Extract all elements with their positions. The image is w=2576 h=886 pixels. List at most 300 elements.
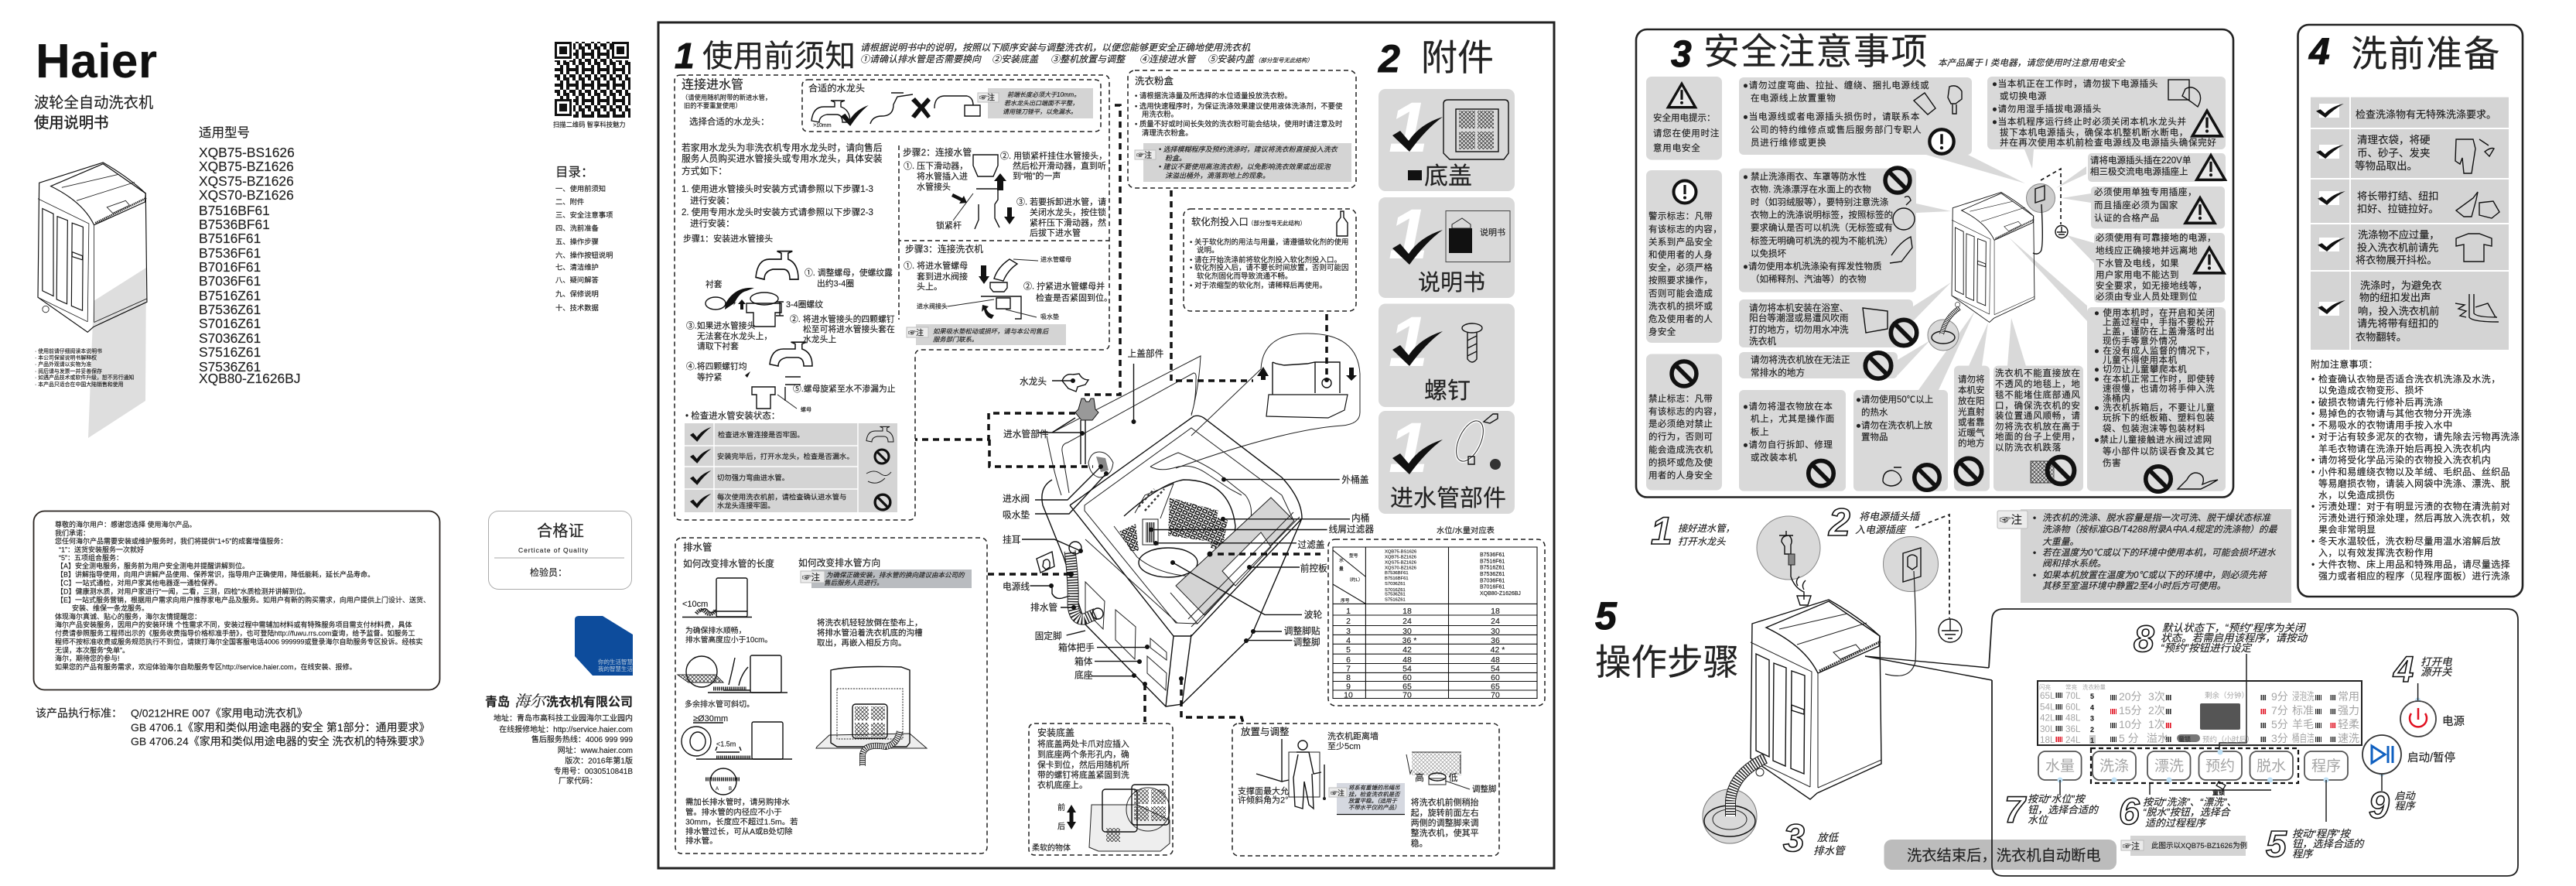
accessory card: manual: 说明书 xyxy=(1480,227,1505,238)
panel: drain hose: 售后服务人员进行。 xyxy=(824,579,883,587)
panel: water level table: 54 xyxy=(1491,665,1500,674)
inlet connection instructions: 进行安装： xyxy=(690,195,735,206)
step 2 connect hose: ①. 压下滑动器， xyxy=(904,161,968,171)
panel: install bottom cover: 衣机底座上。 xyxy=(1037,779,1088,790)
panel: section 4 pre-wash preparation: 4 xyxy=(2308,32,2330,73)
accessory card: manual: 说明书 xyxy=(1418,270,1485,296)
panel: connect inlet hose: 旧的不要重复使用） xyxy=(684,102,742,110)
panel: install bottom cover xyxy=(1029,724,1173,855)
safety: power cord xyxy=(1739,77,1972,155)
section 1 heading xyxy=(675,36,1313,76)
step 3 connect machine: 头上。 xyxy=(917,282,942,292)
panel: connect inlet hose: 连接进水管 xyxy=(682,78,743,92)
display panel: 15分 xyxy=(2119,704,2142,717)
safety: unplugging xyxy=(1987,77,2226,149)
panel: drain hose: 将排水管沿着洗衣机底的沟槽 xyxy=(817,628,923,638)
function buttons: 预约 xyxy=(2205,758,2235,775)
step 2 connect hose: ②. 用锁紧杆挂住水管接头， xyxy=(1000,150,1107,161)
grey banner: auto power off xyxy=(1884,840,2116,870)
note: faucet length: ☞注 xyxy=(979,93,995,102)
panel: water level table: 7 xyxy=(1346,665,1351,674)
company information: 专用号：0030510841B xyxy=(554,766,633,776)
panel: customer service promise: 您任何海尔产品需要安装或维护服务时，我们将提供“1+5”的成套增值服务： xyxy=(55,537,287,546)
safety: warning sign legend: 和使用者的人身 xyxy=(1648,249,1713,260)
display panel: 速洗 xyxy=(2338,732,2359,744)
display panel: 65L xyxy=(2040,691,2055,701)
table of contents: 九、保修说明 xyxy=(555,289,599,298)
step 8 caption xyxy=(2134,619,2308,660)
panel: customer service promise: 体现海尔真诚、贴心的服务，海尔友情提醒您： xyxy=(55,612,201,621)
panel: section 3 safety notes: 3 xyxy=(1671,34,1692,75)
additional notes list: • xyxy=(2311,455,2315,466)
safety: sunlight: 请勿将 xyxy=(1958,375,1985,385)
accessory card: manual: 1 xyxy=(1389,195,1428,274)
operating steps machine illustration xyxy=(1751,600,1992,799)
display panel: 42L xyxy=(2040,713,2055,724)
safety: humid places: 洗衣机 xyxy=(1749,336,1776,347)
display panel: 1 xyxy=(2090,737,2094,744)
panel: water level table: B7516Z61 xyxy=(1480,566,1505,571)
diagram part labels: 调整脚 xyxy=(1293,637,1320,648)
panel: water level table: 18 xyxy=(1402,607,1412,616)
step 3 connect machine: 步骤3：连接洗衣机 xyxy=(905,244,983,255)
section 1 heading: ⑤安装内盖 xyxy=(1208,54,1255,65)
table of contents: 一、使用前须知 xyxy=(555,184,606,193)
panel: water level table: B7516F61 xyxy=(1480,559,1505,564)
safety: warning sign legend: 危及使用者的人 xyxy=(1648,313,1713,324)
step 1 text: 出约3-4圈 xyxy=(817,278,854,289)
inlet hose check table: 切勿强力弯曲进水管。 xyxy=(717,474,789,482)
panel: detergent box: 用洗衣粉。 xyxy=(1142,110,1178,118)
step 1 text: 水龙头上 xyxy=(803,334,836,344)
safety: warning sign legend: 身安全 xyxy=(1648,327,1676,337)
safety: prohibition sign legend: 能会造成洗衣机 xyxy=(1648,444,1713,455)
preparation checklist: 将长带打结、纽扣 xyxy=(2357,190,2438,202)
display panel: 3 xyxy=(2090,715,2094,723)
safety: sunlight: 放在阳 xyxy=(1958,395,1985,406)
panel: drain hose: 将洗衣机轻轻放倒在垫布上， xyxy=(817,617,922,628)
step 1 text: • 检查进水管安装状态： xyxy=(685,410,780,421)
QR code xyxy=(553,42,630,128)
safety: waterproof clothing: 衣物上的洗涤说明标签，按照标签的 xyxy=(1751,210,1893,221)
cover: applicable models list: B7036F61 xyxy=(199,273,261,289)
cover: applicable models list: B7016F61 xyxy=(199,259,261,275)
panel: water level table: 10 xyxy=(1344,690,1353,700)
diagram part labels: 过滤盖 xyxy=(1297,539,1325,550)
display panel: 洗衣粉量 xyxy=(2082,683,2106,691)
step 2 connect hose: 锁紧杆 xyxy=(936,220,962,231)
note: capacity and temperature: 大重量。 xyxy=(2042,536,2079,547)
step 5 caption xyxy=(2266,824,2365,865)
panel: water level table: 42 xyxy=(1402,645,1412,655)
safety: grounding: 必须使用有可靠接地的电源， xyxy=(2096,232,2216,243)
thick dashed connectors xyxy=(915,105,1327,723)
panel: customer service promise: 尊敬的海尔用户：感谢您选择 使用海尔产品。 xyxy=(55,520,196,529)
table of contents: 四、洗前准备 xyxy=(555,224,599,232)
inlet parts: tap connector, hose and valve xyxy=(1062,374,1113,477)
company information: 海尔 xyxy=(514,693,548,710)
step 3 drain hose xyxy=(1703,758,1847,860)
step 6 caption xyxy=(2119,792,2236,833)
display panel: 3分 xyxy=(2271,732,2288,744)
preparation checklist xyxy=(2311,97,2509,350)
display panel: 18L xyxy=(2040,735,2055,745)
company information: 青岛 xyxy=(485,695,510,710)
table of contents: 二、附件 xyxy=(555,197,584,206)
detergent drawer callout xyxy=(1176,334,1360,468)
panel: water level table: XQS75-BZ1626 xyxy=(1385,560,1416,565)
panel: drain hose: ☞注 xyxy=(802,572,820,583)
safety: power cord: ●当电源线或者电源插头损伤时，请联系本 xyxy=(1743,111,1920,121)
display panel: 7分 xyxy=(2271,704,2288,717)
display panel: 5分 xyxy=(2271,718,2288,730)
button leader lines and child lock xyxy=(2060,683,2418,822)
display panel: 强力 xyxy=(2338,704,2359,717)
section 5 heading: operating steps: 5 xyxy=(1595,594,1618,638)
panel: water level table: 48 xyxy=(1491,655,1500,665)
panel: install bottom cover: 带的螺钉将底盖紧固到洗 xyxy=(1037,769,1129,780)
power button xyxy=(2400,701,2465,737)
panel: water level table: B7536F61 xyxy=(1480,552,1505,558)
safety: warning sign legend: 否则可能会造成 xyxy=(1648,288,1713,299)
panel: drain hose: 排水管过长，可从A或B处切除 xyxy=(685,826,793,836)
display panel: 70L xyxy=(2065,691,2081,701)
cover: applicable models list: B7516BF61 xyxy=(199,203,270,218)
company information: 版次：2016年第1版 xyxy=(565,756,633,766)
note: capacity and temperature: 若在温度为0℃或以下的环境中使用本机，可能会损坏进水 xyxy=(2042,547,2277,558)
panel: softener inlet: • 请在开始洗涤前将软化剂投入软化剂投入口。 xyxy=(1190,255,1341,265)
panel: drain hose: 如何改变排水管的长度 xyxy=(683,558,774,569)
display panel: 30L xyxy=(2040,724,2055,734)
safety: hot water: 置物品 xyxy=(1861,432,1888,443)
safety: wet clothes: 或改装本机 xyxy=(1751,452,1798,463)
company information: 网址：www.haier.com xyxy=(558,745,633,755)
safety: children: ● 在本机正常工作时，即使转 xyxy=(2094,373,2216,384)
safety: central washer with socket and drain xyxy=(1928,169,2068,351)
safety: sunlight: 的地方 xyxy=(1958,438,1985,449)
blue brand tag: 你的生活智慧 xyxy=(598,658,633,665)
panel: detergent box: • 质量不好或时间长失效的洗衣粉可能会结块，使用时请注意及时 xyxy=(1135,120,1342,128)
display panel: 2 xyxy=(2090,726,2094,734)
step 3 connect machine: 进水管螺母 xyxy=(1040,255,1071,263)
additional notes list: 以免造成衣物变形、损坏 xyxy=(2318,385,2424,396)
start pause button xyxy=(2362,735,2455,774)
cover: applicable models list: B7536F61 xyxy=(199,245,261,261)
additional notes list: • xyxy=(2311,374,2315,385)
panel: section 3 safety notes: 安全注意事项 xyxy=(1703,31,1929,72)
cover: applicable models list xyxy=(199,125,300,386)
panel: water level table: 量 xyxy=(1339,566,1344,572)
step 3 connect machine xyxy=(904,244,1112,320)
step 2 connect hose: 将水管插入进 xyxy=(917,170,968,181)
safety: drainage: 常排水的地方 xyxy=(1751,368,1805,378)
illustration: extend hose: <1.5m xyxy=(716,740,736,747)
safety: warning sign legend: 安全，必须严格 xyxy=(1648,262,1713,273)
additional notes list: 入，以有效发挥洗衣粉作用 xyxy=(2318,546,2434,558)
cover: washing machine illustration xyxy=(38,162,147,438)
diagram part labels: 固定脚 xyxy=(1035,631,1062,641)
display panel: 常用 xyxy=(2338,690,2359,703)
panel: install bottom cover: 保卡到位，然后用随机所 xyxy=(1037,759,1129,770)
inlet connection instructions xyxy=(682,142,883,244)
panel: water level table: 54 xyxy=(1402,665,1412,674)
display panel: 预约（小时后） xyxy=(2202,735,2254,744)
safety: wet clothes: ●请勿将湿衣物放在本 xyxy=(1743,401,1833,412)
safety: power cord: ●请勿过度弯曲、拉扯、缠绕、捆扎电源线或 xyxy=(1743,80,1929,91)
panel: softener inlet: 软化剂固化而导致流通不畅。 xyxy=(1197,272,1293,281)
panel: customer service promise: “5”：五项组合服务： xyxy=(59,553,123,562)
accessory card: bottom cover: 1 xyxy=(1389,88,1428,167)
safety: dedicated socket: 认证的合格产品 xyxy=(2094,213,2160,224)
display panel: 浸泡洗 xyxy=(2292,690,2315,703)
step 2 connect hose: 关闭水龙头，按住锁 xyxy=(1030,207,1106,217)
preparation checklist: 衣物翻转。 xyxy=(2356,331,2407,343)
step 2 connect hose: 水管接头 xyxy=(917,181,951,192)
step 1 text: 螺母 xyxy=(801,405,811,412)
panel: water level table: B7016F61 xyxy=(1480,585,1505,590)
safety: grounding: 地线应正确接地并远离地 xyxy=(2096,245,2198,255)
step 7 caption: 按动“水位”按 xyxy=(2028,793,2086,805)
panel: placement and levelling: 将系有重锤的吊绳吊 xyxy=(1348,784,1400,791)
inlet connection instructions: 1. 使用进水管接头时安装方式请参照以下步骤1-3 xyxy=(682,183,873,194)
section 2 heading: accessories: 附件 xyxy=(1421,37,1494,78)
diagram part labels: 前控板 xyxy=(1300,563,1327,574)
machine body outline xyxy=(1042,416,1302,706)
note: illustrated model: 此图示以XQB75-BZ1626为例 xyxy=(2151,841,2247,850)
outer tub cover and drum xyxy=(1150,453,1252,557)
page frame: sections 1 and 2 xyxy=(658,22,1554,868)
safety: carpet xyxy=(1993,366,2083,491)
inlet hose check table xyxy=(685,423,897,512)
display panel: 60L xyxy=(2065,703,2081,713)
safety: electricity tip: 安全用电提示： xyxy=(1653,112,1716,123)
safety: prohibition sign legend: 的损坏或危及使 xyxy=(1648,457,1713,467)
inlet connection instructions: 服务人员购买进水管接头或专用水龙头，具体安装 xyxy=(682,153,883,164)
panel: customer service promise xyxy=(34,511,439,690)
panel: water level table: 8 xyxy=(1346,673,1351,682)
step 1 text: ①. 调整螺母，使螺纹露 xyxy=(805,267,893,278)
table of contents: 八、疑问解答 xyxy=(555,275,599,284)
panel: drain hose: 为确保正确安装，排水管的换向建议由本公司的 xyxy=(826,571,965,579)
panel: customer service promise: 安装、维保一条龙服务。 xyxy=(72,604,149,612)
panel: water level table: 型号 xyxy=(1349,552,1358,559)
step 1 text: 松至可将进水管接头套在 xyxy=(803,323,895,334)
step 6 caption: 按动“洗涤”、“漂洗”、 xyxy=(2143,796,2236,808)
certificate of quality: 检验员： xyxy=(530,566,567,578)
additional notes list: • xyxy=(2311,419,2315,430)
step 7 caption: 7 xyxy=(2004,790,2027,831)
step 9 caption xyxy=(2369,785,2417,826)
safety: grounding: 下水管及电线，如果 xyxy=(2096,258,2179,269)
safety: carpet: 勿将洗衣机放在高于 xyxy=(1995,421,2081,432)
step 1 open tap: 打开水龙头 xyxy=(1678,536,1726,547)
panel: drain hose xyxy=(675,538,987,854)
safety: children: ● 在没有成人监督的情况下， xyxy=(2094,345,2216,356)
machine lid xyxy=(1047,356,1201,495)
panel: detergent box: 粉盒。 xyxy=(1165,155,1186,162)
diagram part labels: 排水管 xyxy=(1030,602,1057,613)
cover: product title xyxy=(34,94,153,132)
panel: detergent box xyxy=(1128,70,1356,188)
suitable faucet box: 合适的水龙头 xyxy=(808,82,865,94)
display panel: 常亮 xyxy=(2065,683,2078,691)
safety: prohibition sign legend: 禁止标志：凡带 xyxy=(1648,394,1713,404)
step 2 connect hose: 紧杆压下滑动器，然 xyxy=(1030,217,1106,227)
safety: waterproof clothing: 时（如羽绒服等），要特别注意洗涤 xyxy=(1751,197,1889,207)
function buttons xyxy=(2038,698,2421,783)
note: capacity and temperature xyxy=(1997,509,2291,603)
safety: waterproof clothing: 标签无明确可机洗的视为不能机洗） xyxy=(1751,235,1893,246)
safety: drainage: 请勿将洗衣机放在无法正 xyxy=(1751,354,1850,365)
panel: customer service promise: 如果您的产品有服务需求，欢迎体验海尔自助服务专区http://service.haier.com，在线安装、报修。 xyxy=(55,662,357,671)
inlet connection instructions: 方式如下： xyxy=(682,166,727,176)
note: washer gasket: 如果吸水垫松动或损坏，请与本公司售后 xyxy=(933,327,1050,335)
accessory card: screw xyxy=(1379,303,1515,407)
preparation checklist: 洗涤物不应过量， xyxy=(2358,229,2440,241)
safety: hot water xyxy=(1853,390,1948,491)
section 1 heading: ④连接进水管 xyxy=(1139,54,1197,65)
additional notes list: • xyxy=(2311,397,2315,408)
panel: detergent box: • 选用快速程序时，为保证洗涤效果建议使用液体洗涤剂，不要使 xyxy=(1135,102,1343,111)
panel: placement and levelling: ☞注 xyxy=(1331,789,1344,797)
safety: dedicated socket: 必须使用单独专用插座， xyxy=(2094,186,2197,197)
display panel: 溢水 xyxy=(2147,732,2168,744)
leader lines xyxy=(1022,364,1350,686)
step 5 caption: 按动“程序”按 xyxy=(2292,828,2352,840)
cover: applicable models list: XQB75-BS1626 xyxy=(199,145,295,160)
accessory card: inlet hose: 进水管部件 xyxy=(1390,486,1506,511)
panel: water level table: B7516BF61 xyxy=(1385,576,1409,581)
illustration: hose height xyxy=(682,578,752,617)
panel: placement and levelling: 低 xyxy=(1448,772,1458,783)
inlet hose check table: 每次使用洗衣机前，请检查确认进水管与 xyxy=(717,493,846,501)
cover: usage notes: · 如遇产品技术或软件升级，恕不另行通知 xyxy=(35,374,134,381)
panel: water level table: 30 xyxy=(1491,627,1500,636)
panel: connect inlet hose: （请使用随机附带的新进水管， xyxy=(682,94,771,101)
cover: brand logo: Haier xyxy=(36,35,157,88)
step 2 plug in xyxy=(1828,501,1962,676)
safety: power cord: 公司的特约维修点或售后服务部门专职人 xyxy=(1751,124,1922,135)
diagram part labels xyxy=(1003,348,1374,681)
note: capacity and temperature: • xyxy=(2033,512,2036,523)
table of contents: 十、技术数据 xyxy=(555,303,599,312)
note: capacity and temperature: 阀和排水系统。 xyxy=(2042,558,2106,569)
step 6 caption: “脱水”按钮，选择合 xyxy=(2143,806,2232,818)
panel: placement and levelling: 稳。 xyxy=(1411,837,1428,848)
illustration: adjustable foot xyxy=(1406,752,1470,789)
panel: placement and levelling: 许倾斜角为2° xyxy=(1238,795,1289,806)
cover: applicable models list: XQB80-Z1626BJ xyxy=(199,371,300,386)
safety: carpet: 洗衣机不能直接放在 xyxy=(1995,368,2081,378)
note: washer gasket: 服务部门联系。 xyxy=(933,335,978,343)
inlet hose check table: 安装完毕后，打开水龙头，检查是否漏水。 xyxy=(717,452,854,460)
panel: water level table: S7516Z61 xyxy=(1385,597,1406,602)
step 3 drain hose: 放低 xyxy=(1817,832,1840,843)
display panel xyxy=(2038,654,2362,752)
step 1 open tap: 接好进水管， xyxy=(1678,523,1735,534)
step 1 text: 3-4圈螺纹 xyxy=(786,299,823,310)
illustration: person with plumb line xyxy=(1256,739,1326,809)
step 1 text: ⑤.螺母旋紧至水不渗漏为止 xyxy=(793,383,896,394)
panel: install bottom cover: 安装底盖 xyxy=(1037,727,1074,738)
cover: usage notes: · 阅后请与发票一并妥善保存 xyxy=(35,368,102,375)
step 2 connect hose xyxy=(903,147,1107,238)
inlet hose check table: 水龙头连接牢固。 xyxy=(717,501,774,510)
safety: grounding: 必须由专业人员处理到位 xyxy=(2096,291,2198,302)
panel: customer service promise: 【C】一站式通检，对用户家其他电器逐一通检保养。 xyxy=(56,579,222,587)
safety: waterproof clothing: 要求确认是否可以机洗（无标签或有 xyxy=(1751,222,1893,233)
panel: placement and levelling: 不带水平仪的产品） xyxy=(1348,804,1400,811)
accessory card: bottom cover: 底盖 xyxy=(1424,162,1472,190)
safety: waterproof clothing: 衣物. 洗涤漂浮在水面上的衣物 xyxy=(1751,184,1871,195)
execution standards: GB 4706.24《家用和类似用途电器的安全 洗衣机的特殊要求》 xyxy=(131,735,430,747)
certificate of quality: 合格证 xyxy=(537,522,584,540)
safety: sunlight: 本机安 xyxy=(1958,385,1985,395)
step 2 plug in: 将电源插头插 xyxy=(1859,511,1921,522)
safety: unplugging: ●当本机程序运行终止时必须关闭本机水龙头并 xyxy=(1992,116,2187,127)
cover: applicable models list: B7516Z61 xyxy=(199,288,261,303)
step 5 caption: 钮，选择合适的 xyxy=(2292,838,2365,850)
cover: applicable models list: XQB75-BZ1626 xyxy=(199,159,294,174)
additional notes list: • xyxy=(2311,501,2315,512)
safety: 220V socket: 相三极交流电电源插座上 xyxy=(2090,166,2188,176)
panel: placement and levelling: 挂，检查洗衣机是否 xyxy=(1348,791,1401,798)
panel: placement and levelling: 将洗衣机前侧稍抬 xyxy=(1411,797,1479,808)
panel: install bottom cover: 柔软的物体 xyxy=(1032,843,1071,853)
panel: install bottom cover: 到底座两个条形孔内，确 xyxy=(1037,749,1129,760)
preparation checklist: 扣好、拉链拉好。 xyxy=(2357,203,2438,214)
panel: softener inlet: （部分型号无此结构） xyxy=(1248,219,1306,227)
section 1 heading: 1 xyxy=(675,36,695,76)
note: faucet length: 若水龙头出口端面不平整， xyxy=(1004,100,1078,107)
step 3 drain hose: 3 xyxy=(1783,816,1805,860)
display panel: 24L xyxy=(2065,735,2081,745)
safety: children: 玩拆下的纸板箱、塑料包装 xyxy=(2103,412,2215,423)
step 8 caption: 8 xyxy=(2134,619,2154,660)
panel: water level table: 6 xyxy=(1346,655,1351,665)
note: illustrated model xyxy=(2121,836,2247,856)
panel: detergent box: 洗衣粉盒 xyxy=(1135,75,1174,87)
safety: electricity tip xyxy=(1646,77,1722,160)
preparation checklist: 响，投入洗衣机前 xyxy=(2358,305,2440,317)
safety: prohibition sign legend: 有该标志的内容， xyxy=(1648,405,1722,416)
step 3 connect machine: 进水阀接头 xyxy=(917,303,948,310)
safety: carpet: 不透风的地毯上，地 xyxy=(1995,378,2081,389)
inlet hose check table: 检查进水管连接是否牢固。 xyxy=(718,430,805,439)
step 2 plug in: 2 xyxy=(1828,501,1850,544)
safety: carpet: 装位置通风顺畅，请 xyxy=(1995,410,2081,421)
certificate of quality xyxy=(489,511,631,590)
panel: customer service promise: 海尔，期待您的参与! xyxy=(55,654,120,662)
display panel: 9分 xyxy=(2271,690,2288,703)
safety: wet clothes xyxy=(1739,390,1846,491)
panel: detergent box: ☞注 xyxy=(1136,150,1152,160)
diagram part labels: 电源线 xyxy=(1003,581,1030,592)
panel: softener inlet xyxy=(1184,209,1356,311)
panel: customer service promise: 程师不按标准收费或服务规范执行不到位，请拨打海尔全国客服电话4006 999999或登录海尔自助服务专区投诉。经核实 xyxy=(55,637,423,645)
diagram part labels: 箱体把手 xyxy=(1058,642,1095,653)
step 2 connect hose: 然后松开滑动器，直到听 xyxy=(1013,160,1106,171)
illustration: extend hose: B xyxy=(729,787,732,792)
step 2 plug in: 入电源插座 xyxy=(1855,524,1907,535)
accessory card: manual xyxy=(1379,195,1515,298)
safety: 220V socket xyxy=(2088,153,2226,182)
diagram part labels: 挂耳 xyxy=(1003,534,1021,545)
safety: wet clothes: 机上，尤其是操作面 xyxy=(1751,413,1835,424)
panel: water level table: 水 xyxy=(1339,557,1344,563)
panel: water level table: S7536Z61 xyxy=(1385,593,1406,597)
panel: section 4 pre-wash preparation xyxy=(2298,25,2523,597)
